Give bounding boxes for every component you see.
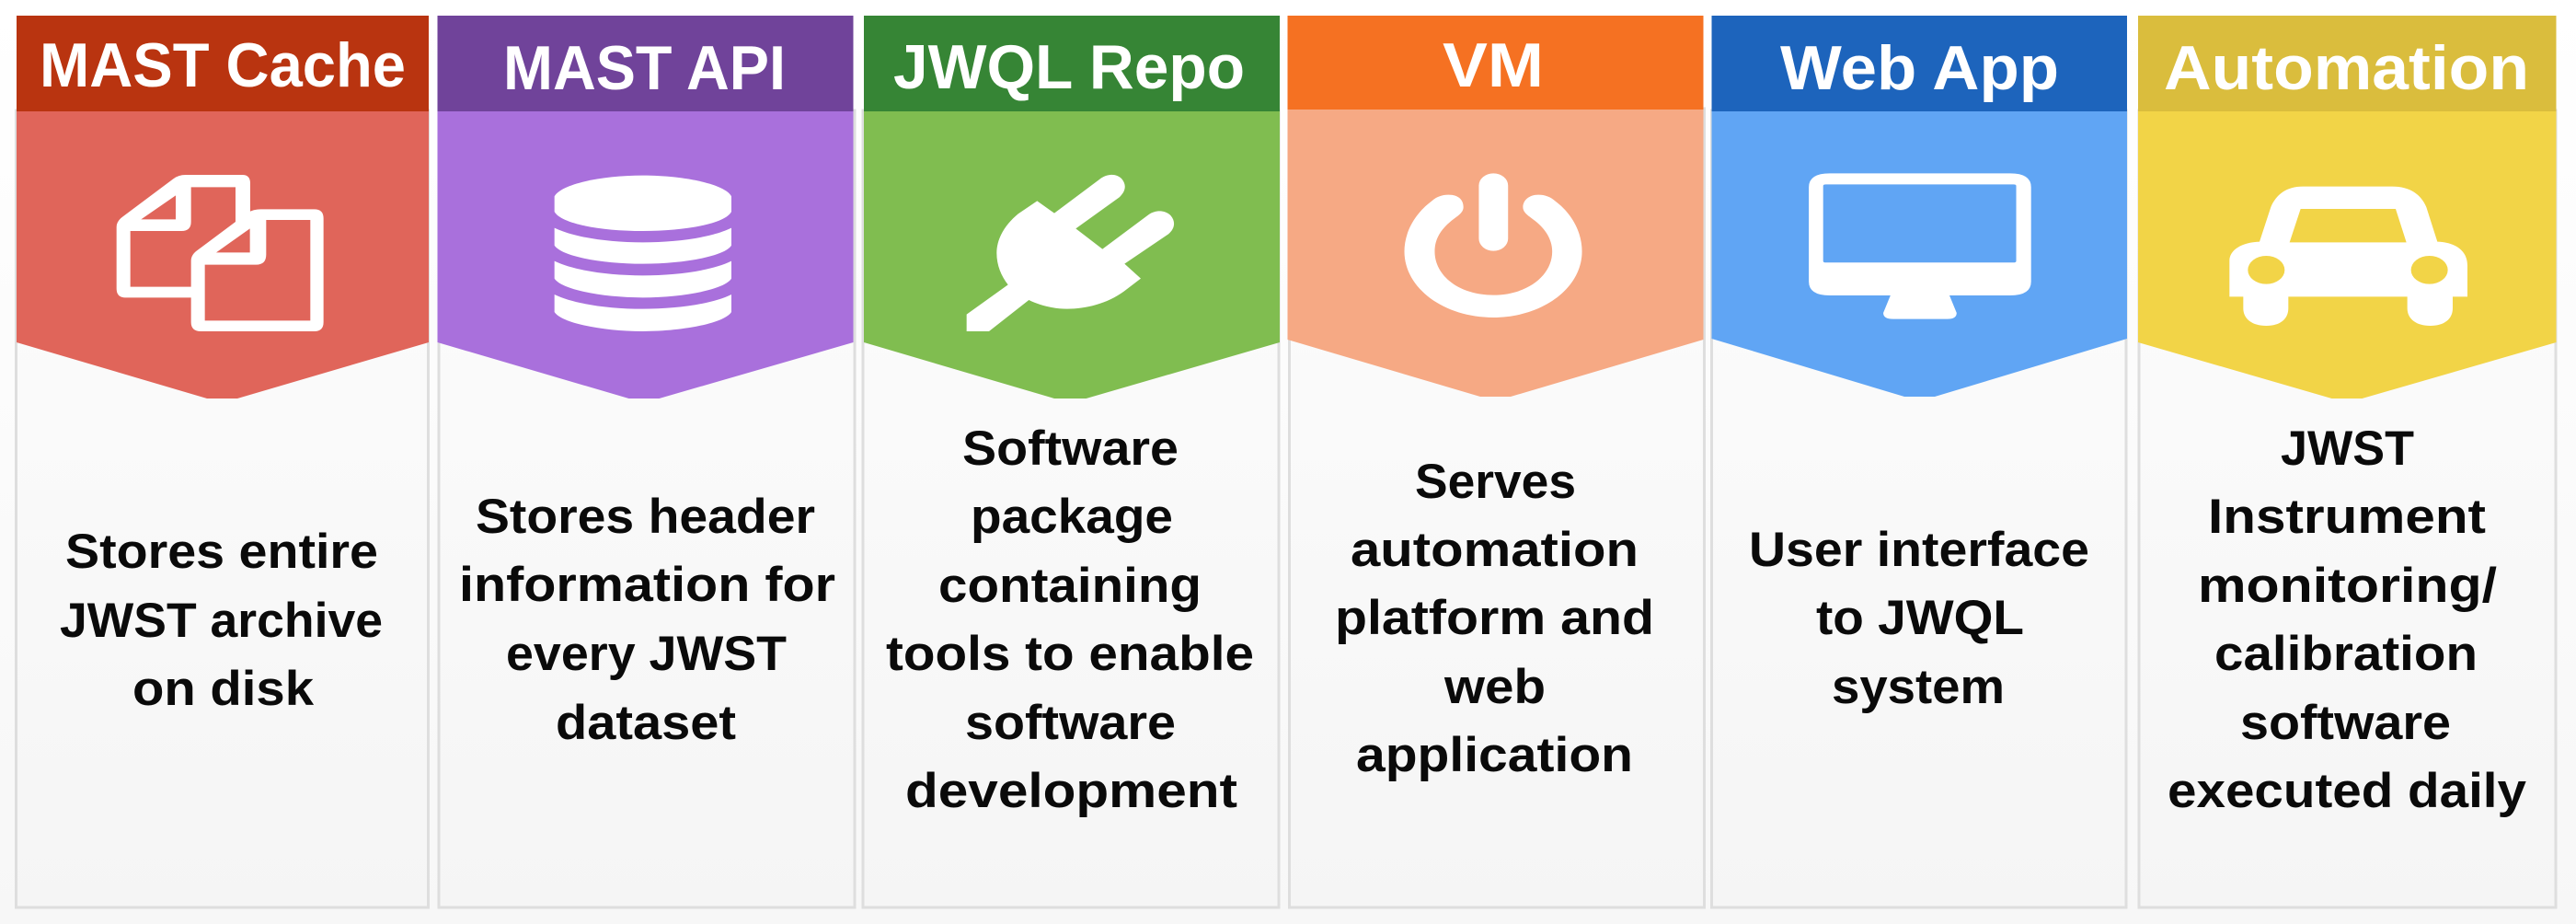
- description: VM: web: [1443, 660, 1546, 714]
- panel: VM: [1288, 16, 1704, 907]
- description: JWQL Repo: [886, 422, 1254, 818]
- header bar: MAST API: MAST API: [503, 33, 786, 103]
- description: MAST API: Stores header: [476, 490, 815, 544]
- icon: car: [2229, 187, 2467, 326]
- description: MAST Cache: [60, 525, 383, 716]
- header bar: Automation: Automation: [2164, 33, 2529, 103]
- description: Web App: User interface: [1749, 523, 2089, 577]
- panel: Automation: [2138, 16, 2556, 907]
- description: Automation: software: [2240, 696, 2451, 750]
- description: MAST API: dataset: [556, 696, 736, 750]
- description: Automation: executed daily: [2168, 764, 2527, 818]
- description: JWQL Repo: software: [965, 696, 1176, 750]
- icon: documents: [117, 175, 324, 331]
- description: Automation: [2168, 422, 2527, 818]
- description: MAST API: information for: [459, 558, 835, 612]
- header bar: MAST API: [438, 16, 854, 111]
- description: Automation: calibration: [2214, 627, 2478, 681]
- description: Automation: monitoring/: [2198, 559, 2497, 613]
- description: JWQL Repo: package: [971, 490, 1173, 544]
- description: Web App: [1749, 523, 2089, 714]
- ribbon: MAST API body: [438, 111, 854, 398]
- ribbon: JWQL Repo body: [864, 111, 1280, 398]
- panel: Web App: [1711, 16, 2127, 907]
- description: JWQL Repo: development: [905, 764, 1237, 818]
- description: VM: automation: [1351, 523, 1639, 577]
- description: Web App: to JWQL: [1816, 591, 2024, 645]
- icon: power: [1405, 173, 1582, 318]
- description: MAST Cache: JWST archive: [60, 594, 383, 648]
- description: Automation: Instrument: [2208, 490, 2486, 544]
- panel: MAST Cache: [17, 16, 429, 907]
- description: MAST API: every JWST: [506, 627, 787, 681]
- ribbon: Automation body: [2138, 111, 2556, 398]
- description: JWQL Repo: tools to enable: [886, 627, 1254, 681]
- description: Web App: system: [1832, 660, 2005, 714]
- panel: JWQL Repo: [863, 16, 1280, 907]
- header bar: JWQL Repo: JWQL Repo: [893, 32, 1245, 102]
- description: JWQL Repo: containing: [938, 559, 1202, 613]
- description: JWQL Repo: Software: [962, 422, 1179, 476]
- header bar: Web App: Web App: [1780, 33, 2059, 103]
- icon: database: [555, 176, 731, 331]
- description: VM: application: [1356, 728, 1633, 782]
- description: MAST API: [459, 490, 835, 750]
- ribbon: MAST Cache body: [17, 111, 429, 398]
- icon: plug: [967, 175, 1174, 331]
- icon: monitor: [1809, 173, 2031, 319]
- header bar: Automation: [2138, 16, 2556, 111]
- description: MAST Cache: Stores entire: [65, 525, 378, 579]
- description: VM: Serves: [1415, 455, 1576, 509]
- header bar: Web App: [1711, 16, 2127, 111]
- ribbon: Web App body: [1711, 111, 2127, 397]
- description: Automation: JWST: [2281, 422, 2414, 476]
- header bar: MAST Cache: [17, 16, 429, 111]
- header bar: VM: VM: [1443, 30, 1544, 100]
- header bar: JWQL Repo: [864, 16, 1280, 111]
- ribbon: VM body: [1288, 110, 1704, 397]
- panel: MAST API: [438, 16, 855, 907]
- header bar: VM: [1288, 16, 1704, 110]
- description: VM: [1335, 455, 1654, 782]
- header bar: MAST Cache: MAST Cache: [40, 30, 406, 100]
- description: MAST Cache: on disk: [132, 662, 315, 716]
- description: VM: platform and: [1335, 591, 1654, 645]
